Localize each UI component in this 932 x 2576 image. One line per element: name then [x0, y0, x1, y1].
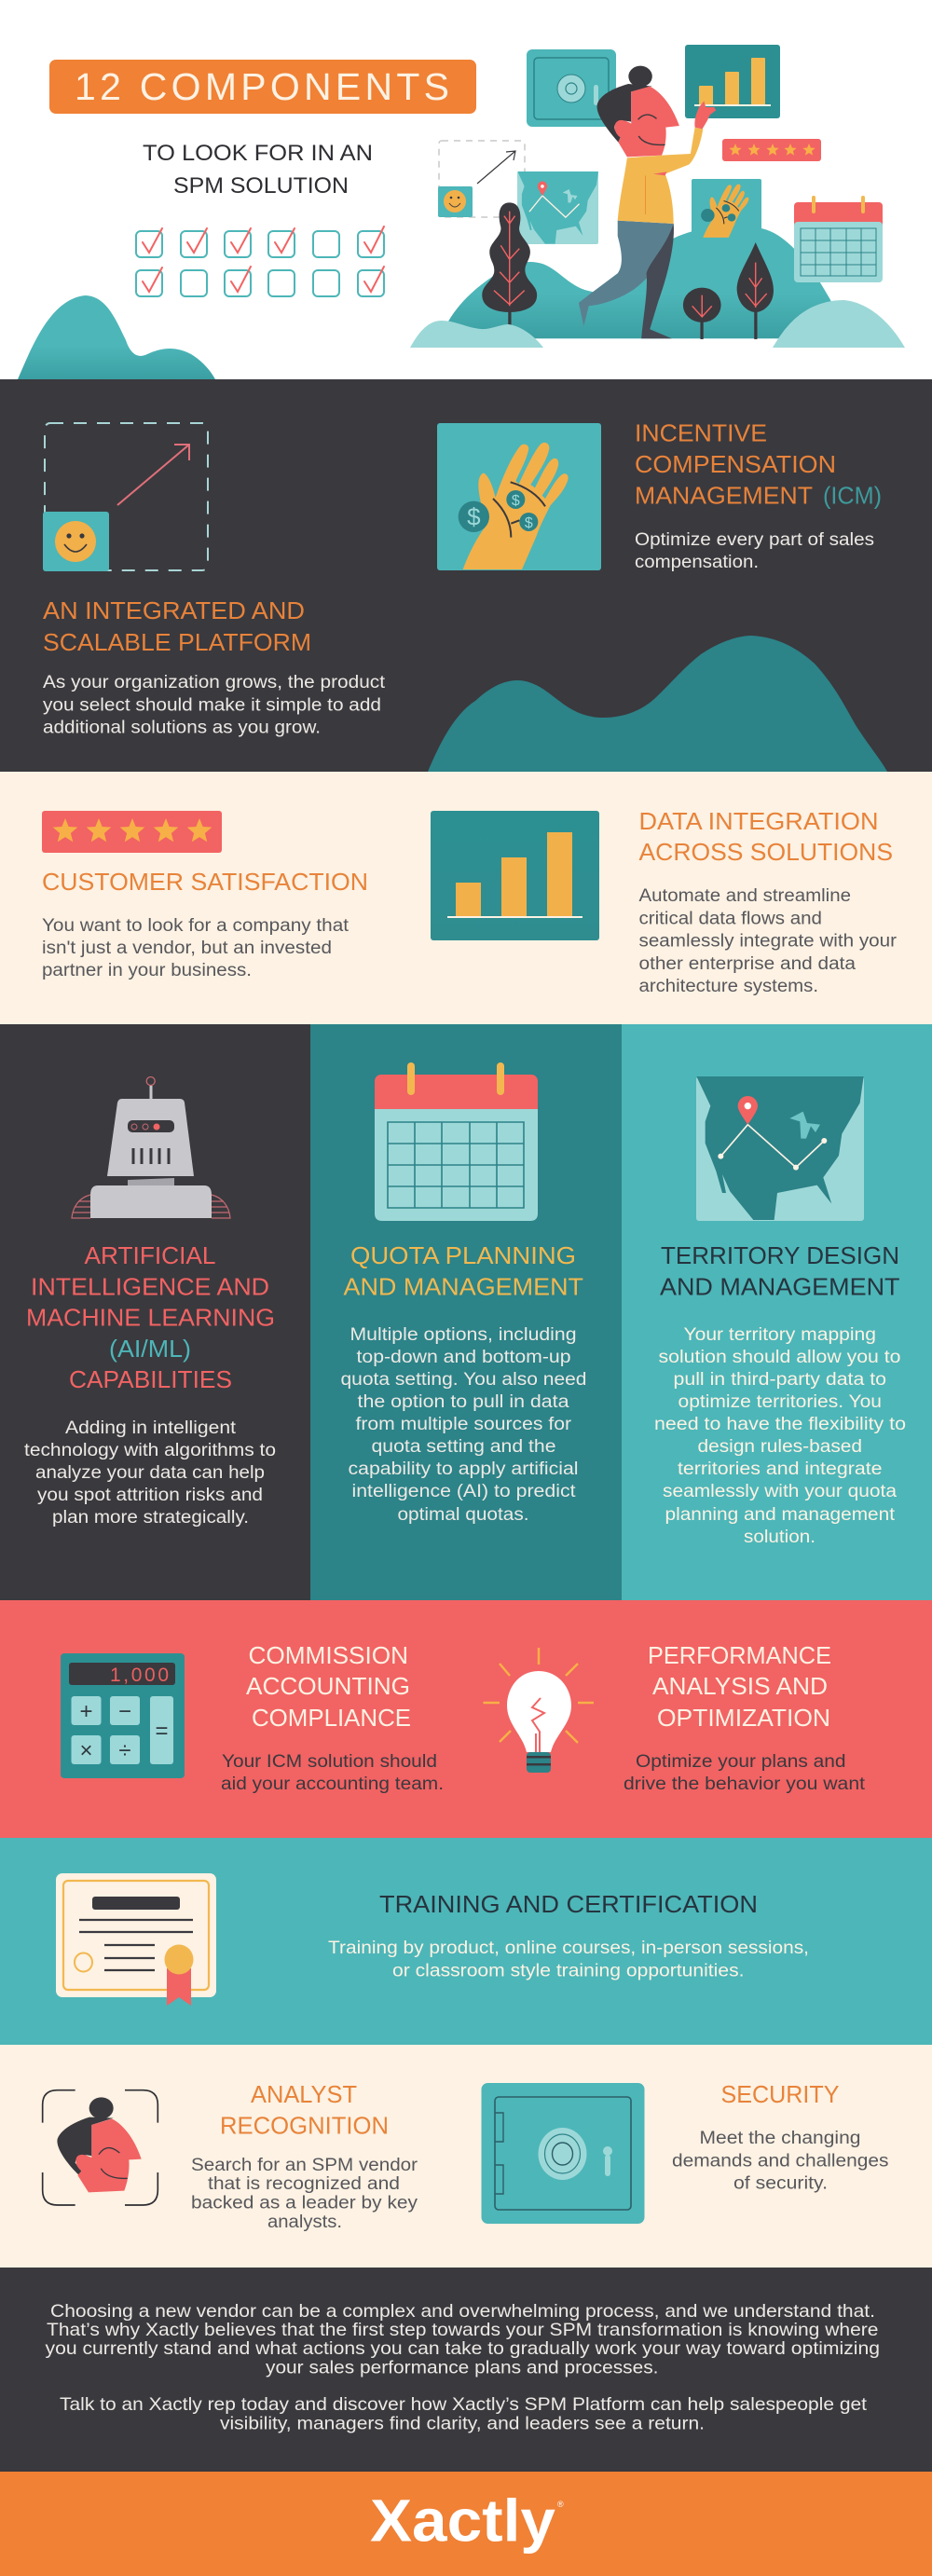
heading: ICM: COMPENSATION [635, 452, 836, 478]
bar chart panel [685, 45, 780, 118]
icon: calculator: = [155, 1719, 169, 1744]
icon: calculator: ÷ [118, 1738, 131, 1763]
heading: integrated platform: AN INTEGRATED AND [43, 598, 305, 624]
text: security [672, 2129, 889, 2194]
icon: calculator [61, 1653, 185, 1778]
icon: calendar [375, 1062, 538, 1221]
safe panel [527, 49, 616, 127]
text: territory design: solution. [744, 1528, 816, 1547]
heading: performance: PERFORMANCE [648, 1643, 831, 1669]
text: quota planning: the option to pull in data [358, 1392, 569, 1412]
text: territory design: design rules-based [697, 1437, 862, 1457]
subtitle: SPM SOLUTION [173, 173, 349, 199]
text: AI and ML: analyze your data can help [35, 1463, 265, 1483]
logo: Xactly: ® [557, 2500, 564, 2509]
panel: training and certification [0, 1838, 932, 2045]
text: analyst recognition: Search for an SPM vendor [191, 2156, 418, 2175]
text: AI and ML: plan more strategically. [52, 1508, 249, 1528]
heading: data integration: DATA INTEGRATION [639, 809, 878, 835]
panel: closing message [0, 2268, 932, 2472]
panel: integrated platform and ICM [0, 379, 932, 772]
text: training: Training by product, online courses, in-person sessions, [328, 1939, 809, 1958]
heading: AI and ML [26, 1243, 275, 1393]
panel: territory design [622, 1024, 932, 1600]
text: territory design [654, 1325, 906, 1547]
icon: map [696, 1076, 864, 1221]
text: ICM [635, 530, 874, 572]
text: quota planning: capability to apply artificial [349, 1459, 578, 1479]
heading: security: SECURITY [721, 2082, 839, 2108]
logo: Xactly: Xactly [370, 2487, 555, 2554]
heading: analyst recognition [220, 2082, 389, 2140]
icon: bar chart [431, 811, 599, 940]
text: security: demands and challenges [672, 2151, 889, 2172]
icon: hand with coins: $ [467, 502, 481, 530]
text: closing paragraph two: Talk to an Xactly rep today and discover how Xactly’s SPM Platform can help salespeople get [60, 2394, 868, 2415]
text: integrated platform: you select should make it simple to add [43, 695, 381, 716]
text: closing paragraph one: you currently stand and what actions you can take to gradually work your way toward optimizing [45, 2338, 880, 2359]
text: customer satisfaction: isn't just a vendor, but an invested [42, 939, 332, 958]
icon: five stars [42, 811, 222, 853]
front mounds [410, 300, 905, 348]
calendar [794, 196, 883, 282]
text: territory design: territories and integrate [678, 1459, 882, 1479]
heading: ICM: INCENTIVE [635, 421, 767, 447]
heading: performance: OPTIMIZATION [657, 1706, 830, 1732]
person [579, 66, 716, 338]
heading: ICM [635, 421, 882, 509]
text: customer satisfaction: partner in your business. [42, 961, 252, 980]
illustration: person with floating components [410, 45, 905, 348]
map panel [517, 171, 598, 244]
heading: territory design [660, 1243, 900, 1301]
text: training [328, 1939, 809, 1981]
text: closing paragraph one: your sales performance plans and processes. [266, 2358, 658, 2378]
text: AI and ML: technology with algorithms to [24, 1441, 276, 1460]
text: quota planning [341, 1325, 587, 1525]
icon: hand with coins: $ [512, 493, 520, 509]
heading: AI and ML: CAPABILITIES [69, 1367, 232, 1393]
text: data integration: Automate and streamline [639, 886, 851, 906]
text: performance: Optimize your plans and [636, 1752, 846, 1772]
text: data integration: critical data flows and [639, 910, 822, 928]
text: closing paragraph one: Choosing a new vendor can be a complex and overwhelming process, and we understand that. [50, 2301, 875, 2322]
star rating panel [722, 139, 821, 161]
text: territory design: pull in third-party data to [673, 1370, 886, 1390]
text: territory design: optimize territories. You [678, 1392, 882, 1412]
text: commission: aid your accounting team. [221, 1774, 444, 1794]
text: territory design: planning and management [665, 1505, 896, 1525]
text: territory design: solution should allow you to [658, 1348, 900, 1367]
trees [482, 202, 774, 339]
text: integrated platform: As your organization grows, the product [43, 673, 386, 692]
hill [428, 636, 887, 772]
icon: scalable box with smiley [43, 423, 208, 571]
heading: analyst recognition: ANALYST [251, 2082, 357, 2108]
checkbox grid [136, 226, 384, 296]
text: analyst recognition: analysts. [267, 2213, 342, 2232]
icon: calculator: × [79, 1738, 93, 1763]
title banner [49, 60, 476, 114]
heading: territory design: TERRITORY DESIGN [661, 1243, 899, 1269]
icon: safe [481, 2083, 645, 2224]
text: performance [624, 1752, 866, 1794]
hand panel [692, 179, 761, 239]
heading: commission [246, 1643, 411, 1732]
text: analyst recognition: that is recognized and [208, 2174, 400, 2194]
text: data integration: seamlessly integrate with your [639, 932, 898, 951]
text: commission [221, 1752, 444, 1794]
icon: calculator: − [118, 1699, 131, 1724]
dashed growth box [438, 141, 525, 217]
text: security: of security. [733, 2173, 828, 2194]
text: customer satisfaction [42, 916, 350, 980]
heading: integrated platform: SCALABLE PLATFORM [43, 630, 311, 656]
heading: data integration [639, 809, 893, 866]
heading: training: TRAINING AND CERTIFICATION [379, 1892, 758, 1918]
heading: integrated platform [43, 598, 311, 656]
heading: quota planning: QUOTA PLANNING [350, 1243, 576, 1269]
text: AI and ML: you spot attrition risks and [37, 1486, 263, 1505]
heading: analyst recognition: RECOGNITION [220, 2114, 389, 2140]
icon: hand with coins [437, 423, 601, 570]
text: integrated platform [43, 673, 386, 738]
text: AI and ML: Adding in intelligent [65, 1418, 237, 1438]
heading: customer satisfaction: CUSTOMER SATISFACTION [42, 870, 368, 896]
text: closing paragraph one: That’s why Xactly believes that the first step towards your SPM transformation is knowing where [47, 2320, 878, 2340]
heading: AI and ML: ARTIFICIAL [84, 1243, 216, 1269]
text: closing paragraph one [45, 2301, 880, 2378]
text: integrated platform: additional solutions as you grow. [43, 718, 321, 738]
text: analyst recognition: backed as a leader by key [191, 2194, 418, 2213]
text: security: Meet the changing [699, 2129, 861, 2148]
text: quota planning: from multiple sources for [356, 1415, 572, 1434]
text: data integration: other enterprise and data [639, 954, 856, 974]
heading: territory design: AND MANAGEMENT [660, 1275, 900, 1301]
heading: performance: ANALYSIS AND [652, 1674, 828, 1700]
icon: calculator: 1,000 [110, 1665, 169, 1686]
panel: quota planning [310, 1024, 622, 1600]
heading: quota planning: AND MANAGEMENT [343, 1275, 583, 1301]
text: quota planning: quota setting. You also need [341, 1370, 587, 1390]
text: AI and ML [24, 1418, 276, 1528]
icon: certificate [56, 1873, 216, 2006]
icon: hand with coins: $ [525, 515, 533, 531]
text: quota planning: optimal quotas. [397, 1505, 529, 1525]
panel: commission and performance [0, 1600, 932, 1838]
heading: ICM: MANAGEMENT [635, 483, 813, 509]
panel: customer satisfaction and data integration [0, 772, 932, 1024]
heading: ICM: (ICM) [823, 483, 882, 509]
subtitle: TO LOOK FOR IN AN [143, 141, 373, 166]
text: commission: Your ICM solution should [222, 1752, 437, 1772]
heading: commission: ACCOUNTING [246, 1674, 410, 1700]
icon: robot [72, 1077, 230, 1218]
icon: light bulb [483, 1648, 594, 1773]
heading: data integration: ACROSS SOLUTIONS [639, 840, 893, 866]
heading: AI and ML: (AI/ML) [109, 1336, 191, 1363]
text: training: or classroom style training opportunities. [392, 1961, 744, 1981]
heading: performance [648, 1643, 831, 1732]
footer with logo [0, 2472, 932, 2576]
panel: AI and ML [0, 1024, 310, 1600]
text: customer satisfaction: You want to look for a company that [42, 916, 350, 936]
panel: analyst recognition and security [0, 2045, 932, 2268]
text: closing paragraph two [60, 2394, 868, 2434]
heading: quota planning [343, 1243, 583, 1301]
icon: calculator: + [79, 1699, 93, 1724]
text: ICM: Optimize every part of sales [635, 530, 874, 550]
main hill [448, 226, 842, 338]
header section [18, 45, 905, 379]
heading: commission: COMMISSION [248, 1643, 408, 1669]
text: quota planning: intelligence (AI) to predict [352, 1482, 576, 1501]
text: closing paragraph two: visibility, managers find clarity, and leaders see a return. [220, 2414, 705, 2434]
text: territory design: seamlessly with your quota [663, 1482, 897, 1501]
text: analyst recognition [191, 2156, 418, 2232]
icon: face in frame [43, 2090, 158, 2205]
text: performance: drive the behavior you want [624, 1774, 866, 1794]
text: data integration: architecture systems. [639, 977, 818, 996]
text: ICM: compensation. [635, 553, 759, 572]
text: quota planning: quota setting and the [371, 1437, 555, 1457]
text: territory design: Your territory mapping [684, 1325, 876, 1345]
heading: AI and ML: INTELLIGENCE AND [31, 1275, 269, 1301]
text: data integration [639, 886, 898, 996]
title banner: 12 COMPONENTS [75, 65, 449, 108]
text: territory design: need to have the flexibility to [654, 1415, 906, 1434]
left hill [18, 295, 215, 379]
heading: commission: COMPLIANCE [252, 1706, 411, 1732]
text: quota planning: Multiple options, including [350, 1325, 576, 1345]
subtitle [143, 141, 373, 199]
heading: AI and ML: MACHINE LEARNING [26, 1305, 275, 1331]
text: quota planning: top-down and bottom-up [356, 1348, 570, 1367]
